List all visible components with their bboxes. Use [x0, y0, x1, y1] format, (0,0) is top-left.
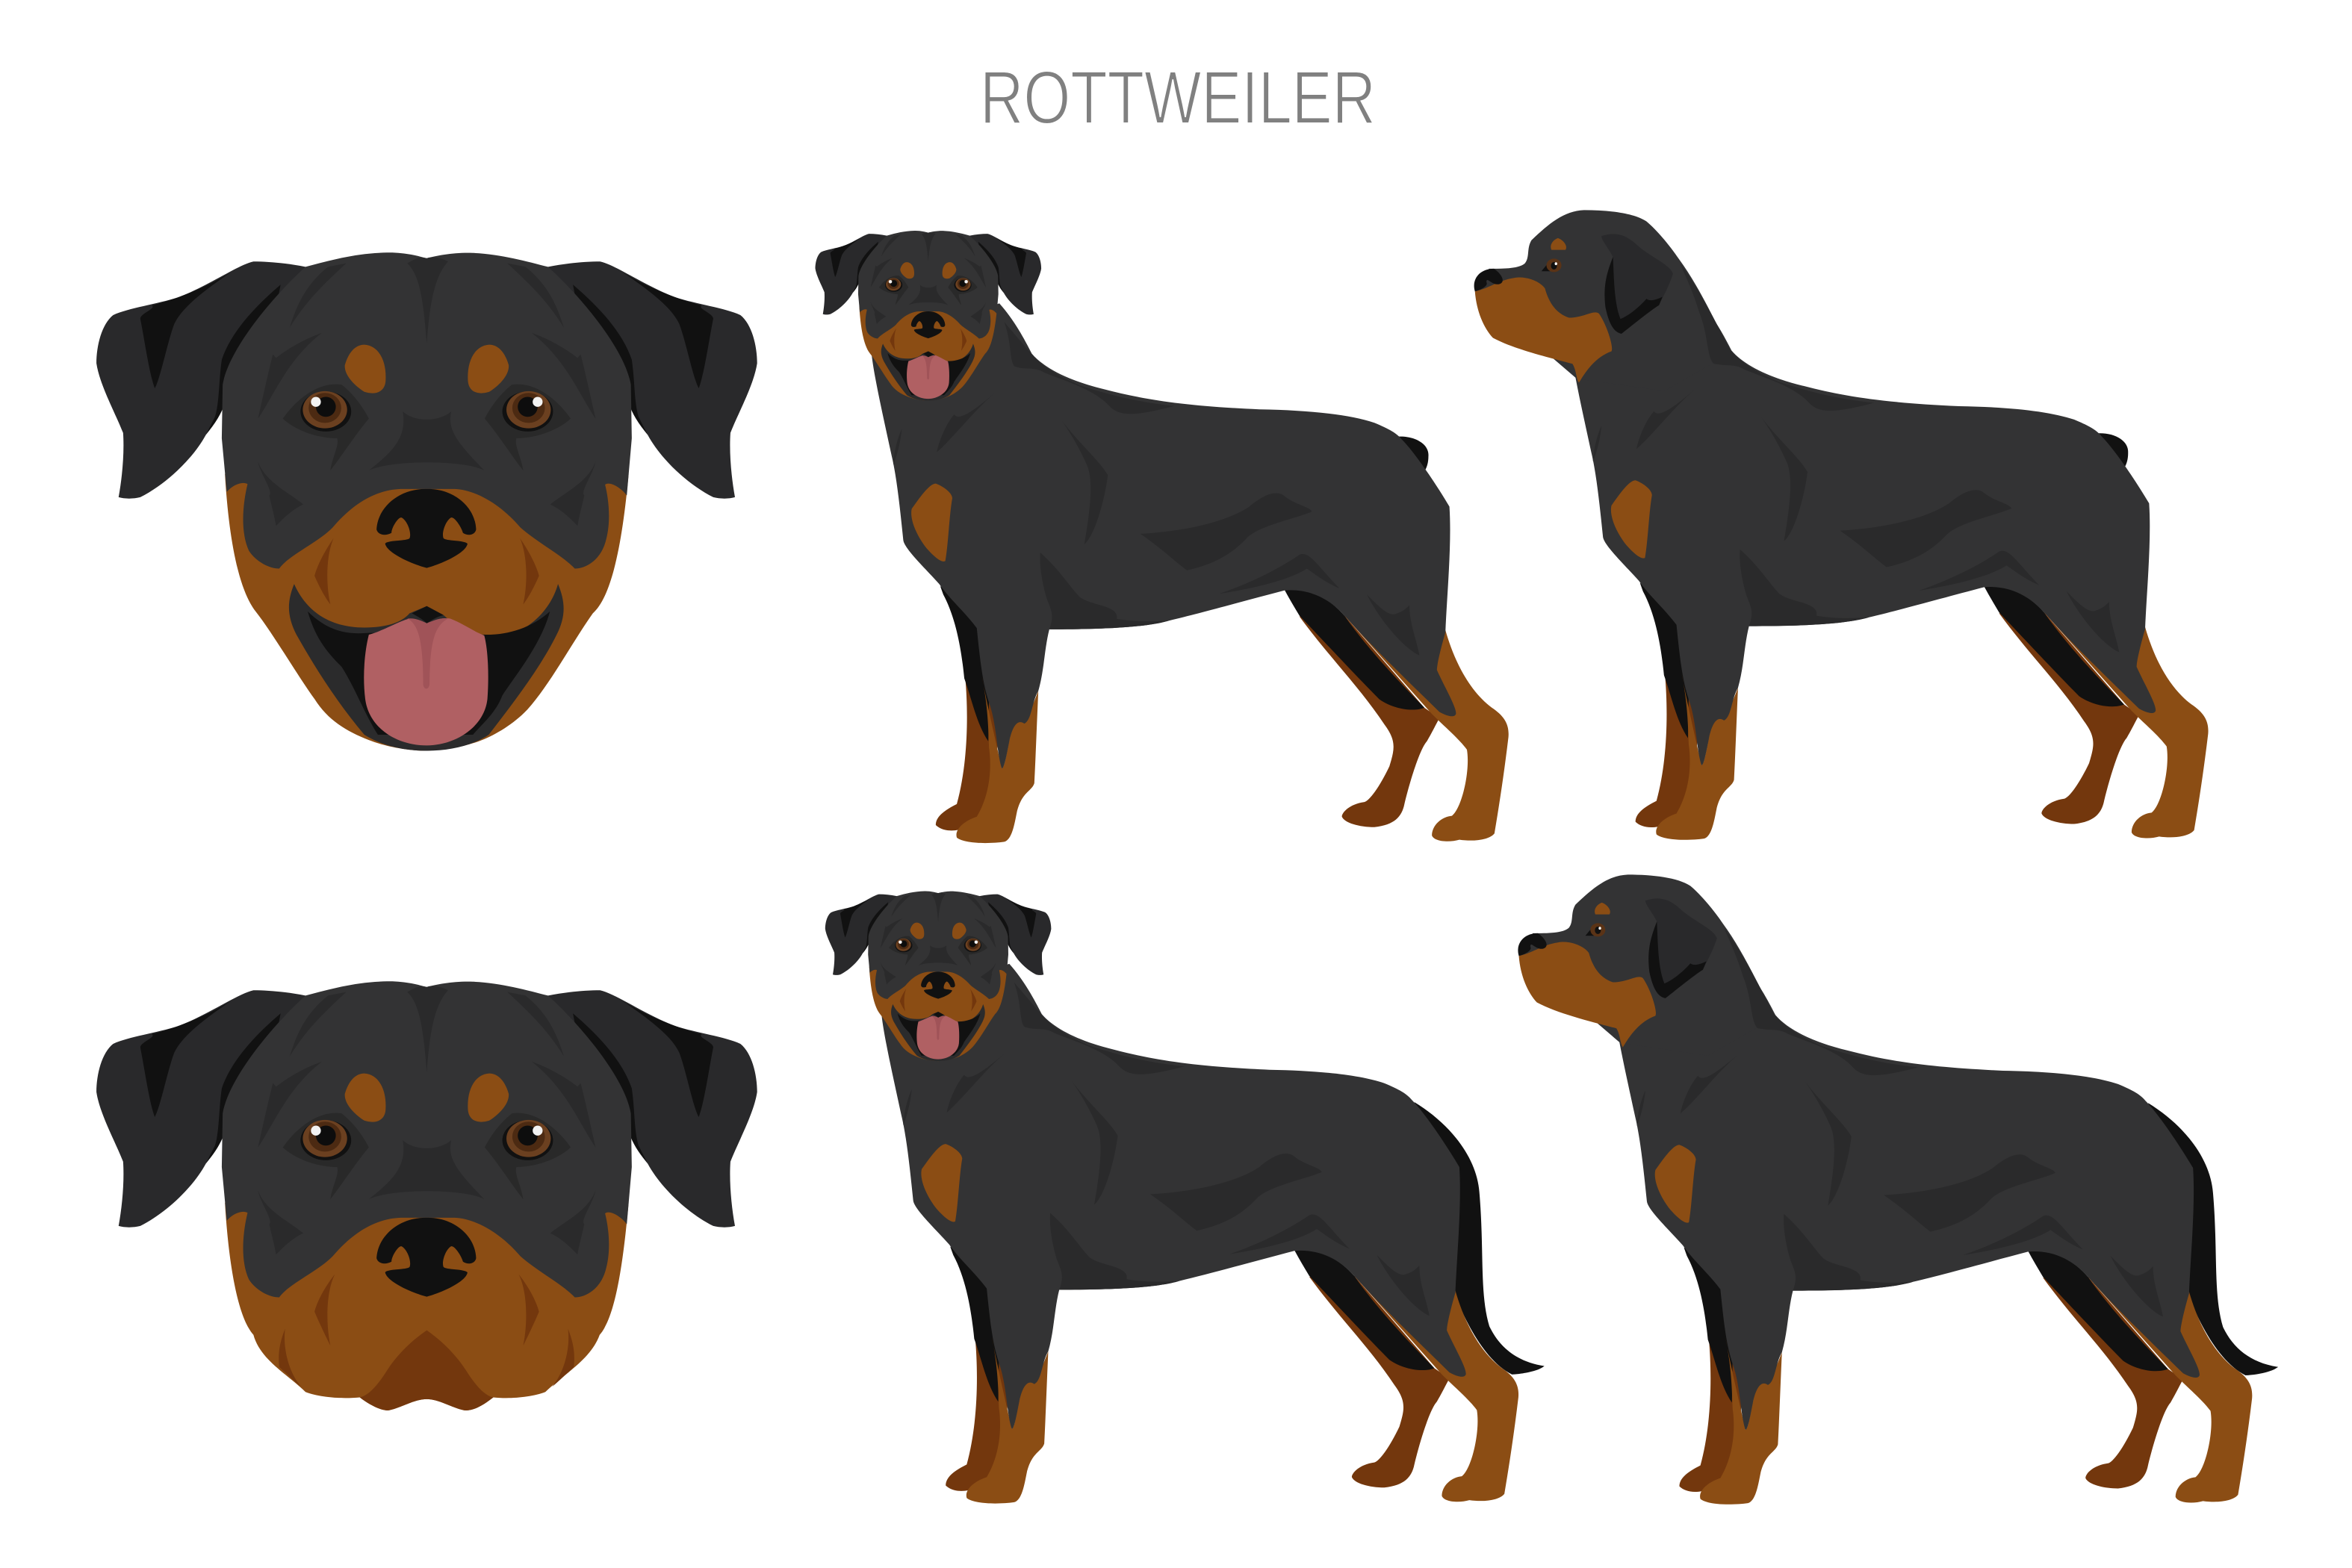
- upper head: [96, 981, 757, 1298]
- body, tail and legs: [881, 964, 1545, 1504]
- dog: standing, front-facing head, docked tail: [816, 231, 1509, 843]
- chin shadow: [360, 1331, 493, 1410]
- body, tail and legs: [1616, 965, 2278, 1505]
- head: [816, 231, 1041, 401]
- muzzle and jaw: [225, 1203, 629, 1410]
- dog: standing, front-facing head, long tail: [825, 892, 1545, 1504]
- dog: profile, long tail: [1518, 874, 2278, 1505]
- title: ROTTWEILER: [980, 56, 1376, 140]
- head in profile: [1474, 210, 1733, 391]
- dog: profile, docked tail: [1474, 210, 2209, 840]
- body and legs: [1571, 300, 2209, 840]
- head: front view, mouth open: [96, 252, 757, 750]
- head: [825, 892, 1051, 1061]
- body and legs: [872, 303, 1509, 843]
- muzzle creases: [279, 1274, 574, 1387]
- head: front view, mouth closed: [96, 981, 757, 1410]
- head in profile: [1518, 874, 1777, 1056]
